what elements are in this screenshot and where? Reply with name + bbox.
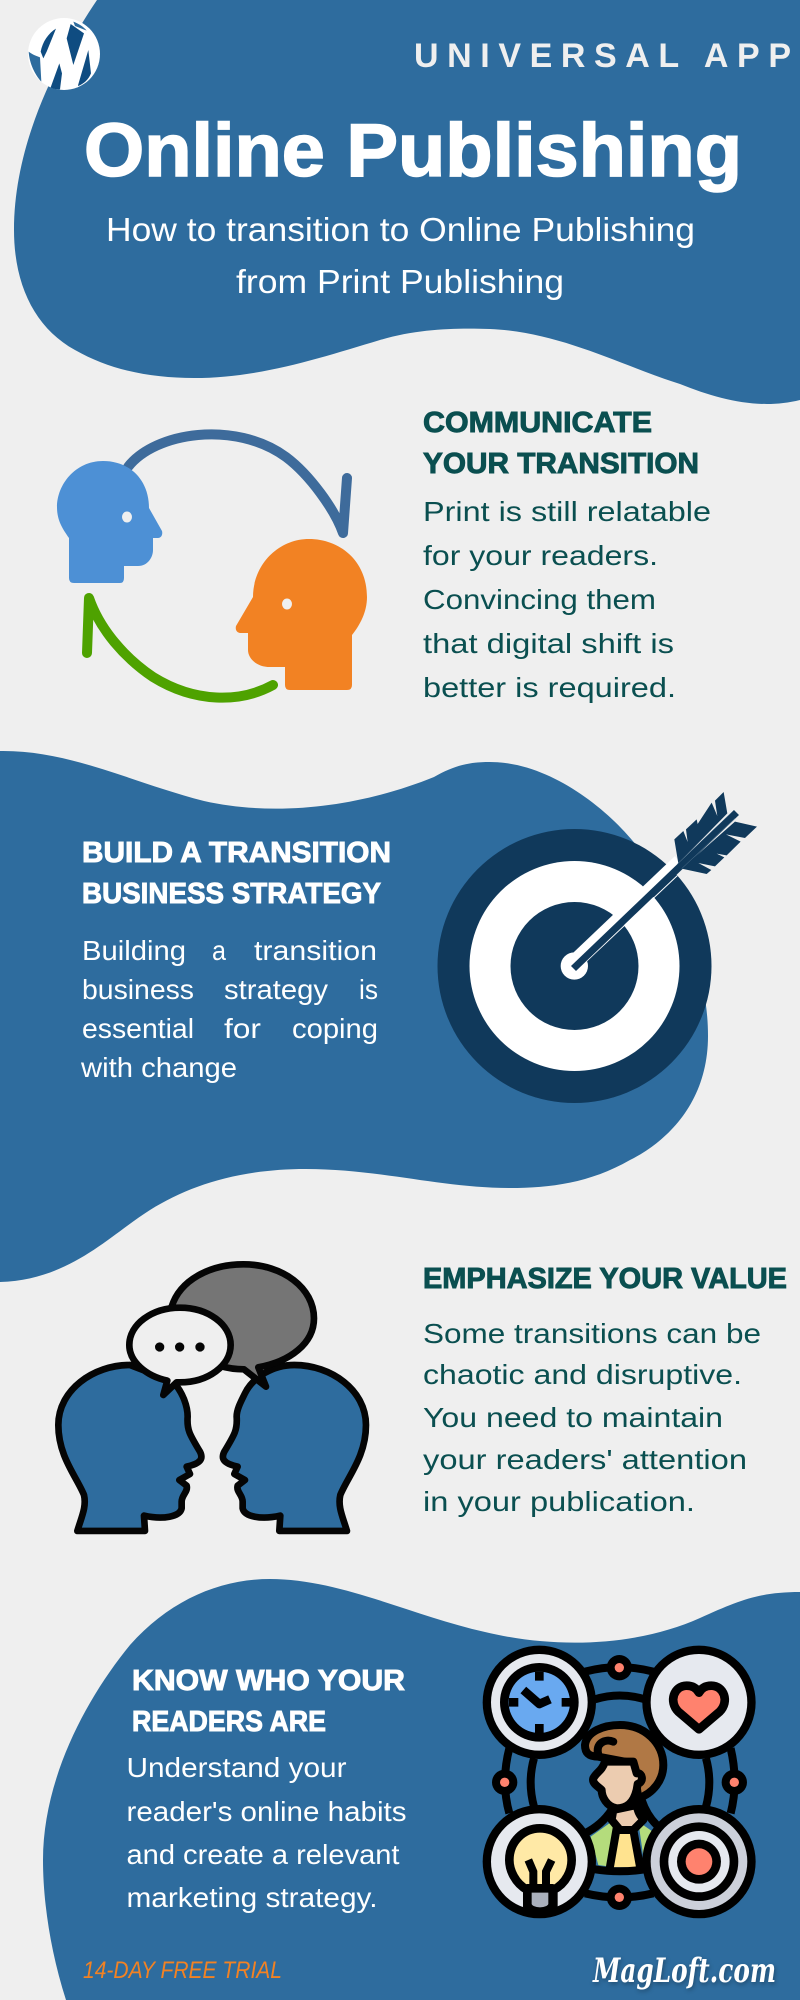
icon: heart xyxy=(642,1646,756,1759)
text block: your readers' attention xyxy=(423,1444,747,1475)
text block: business xyxy=(82,974,194,1005)
heading xyxy=(132,1665,405,1738)
icon: gray speech bubble xyxy=(172,1264,314,1387)
text block: chaotic and disruptive. xyxy=(423,1359,742,1390)
panel: build a transition blob xyxy=(0,751,708,1282)
icon: MagLoft logo xyxy=(28,18,100,90)
icon: white speech bubble xyxy=(129,1308,231,1395)
panel: communicate your transition xyxy=(57,407,711,703)
arrow: green curved arrow xyxy=(87,598,273,698)
arrow: blue curved arrow xyxy=(128,434,347,533)
label: universal app: UNIVERSAL APP xyxy=(414,37,791,75)
heading: COMMUNICATE xyxy=(423,407,652,439)
icon: target xyxy=(642,1805,756,1918)
panel: emphasize your value xyxy=(58,1263,787,1531)
text block: with change xyxy=(80,1052,237,1083)
text block: coping xyxy=(292,1013,378,1044)
text block xyxy=(126,1752,406,1913)
text block: Convincing them xyxy=(423,584,656,615)
text block: a xyxy=(212,935,226,966)
icon: left head xyxy=(58,1365,201,1531)
text block: Print is still relatable xyxy=(423,496,711,527)
icon: light bulb xyxy=(483,1805,596,1918)
text block: is xyxy=(359,974,378,1005)
text block: Some transitions can be xyxy=(423,1318,761,1349)
heading: BUILD A TRANSITION xyxy=(82,837,391,869)
panel: know who your readers are blob xyxy=(43,1579,800,2000)
panel: know who your readers are content xyxy=(83,1646,776,1991)
text block: for your readers. xyxy=(423,540,658,571)
text block: transition xyxy=(254,935,377,966)
connector nodes xyxy=(492,1655,747,1910)
text block: Building xyxy=(82,935,186,966)
heading xyxy=(82,837,391,910)
panel: build a transition content xyxy=(80,792,757,1103)
text block: that digital shift is xyxy=(423,628,674,659)
heading: YOUR TRANSITION xyxy=(423,448,699,480)
footer: free trial text: 14-DAY FREE TRIAL xyxy=(83,1957,282,1984)
title: Online Publishing xyxy=(84,108,742,192)
icon: person xyxy=(585,1725,663,1871)
heading: EMPHASIZE YOUR VALUE xyxy=(423,1263,787,1295)
heading xyxy=(423,407,699,480)
text block xyxy=(80,935,378,1083)
text block: and create a relevant xyxy=(126,1839,400,1870)
icon: exchanging heads with arrows xyxy=(57,434,367,698)
heading: BUSINESS STRATEGY xyxy=(82,878,381,910)
subtitle: How to transition to Online Publishing xyxy=(106,211,695,248)
text block: You need to maintain xyxy=(423,1402,723,1433)
text block: marketing strategy. xyxy=(126,1882,378,1913)
icon: reader profile network xyxy=(483,1646,756,1918)
text block xyxy=(423,496,711,703)
icon: two heads talking xyxy=(58,1264,366,1531)
text block: better is required. xyxy=(423,672,676,703)
heading: KNOW WHO YOUR xyxy=(132,1665,405,1697)
text block: in your publication. xyxy=(423,1486,695,1517)
text block: Understand your xyxy=(126,1752,346,1783)
icon: blue head xyxy=(57,461,162,583)
text block: strategy xyxy=(224,974,328,1005)
text block: reader's online habits xyxy=(126,1796,406,1827)
heading: READERS ARE xyxy=(132,1706,326,1738)
panel: header blob xyxy=(14,0,800,404)
subtitle xyxy=(106,211,695,300)
text block xyxy=(423,1318,761,1517)
icon: clock xyxy=(483,1646,596,1759)
icon: right head xyxy=(223,1365,366,1531)
text block: for xyxy=(224,1013,261,1044)
connectors xyxy=(505,1667,735,1897)
icon: target with arrow xyxy=(438,792,757,1103)
text block: essential xyxy=(82,1013,194,1044)
subtitle: from Print Publishing xyxy=(236,263,564,300)
icon: orange head xyxy=(236,539,367,690)
